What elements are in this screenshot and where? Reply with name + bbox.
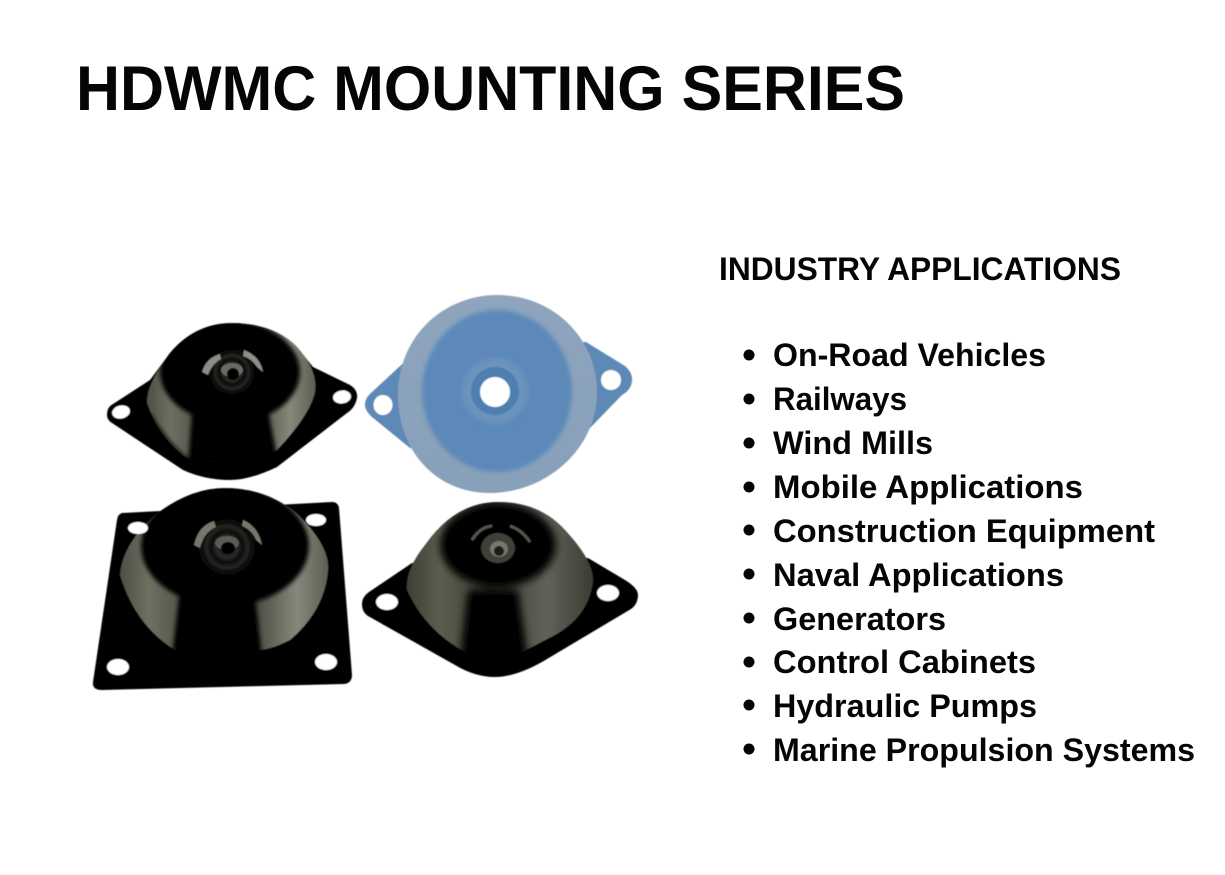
list item: Generators: Generators <box>773 601 946 637</box>
list item: Marine Propulsion Systems: Marine Propulsion Systems <box>773 732 1195 768</box>
mount: blue diamond flange, top right <box>365 295 632 493</box>
mount: black square flange, bottom left <box>93 486 352 690</box>
list item: Control Cabinets: Control Cabinets <box>773 644 1036 680</box>
list item: On-Road Vehicles: On-Road Vehicles <box>773 337 1046 373</box>
threaded insert <box>194 516 262 578</box>
product photo: four anti-vibration mounts <box>93 295 638 690</box>
heading: industry applications: INDUSTRY APPLICATIONS <box>719 251 1121 287</box>
list item: Construction Equipment: Construction Equipment <box>773 513 1155 549</box>
title: HDWMC MOUNTING SERIES <box>76 54 905 124</box>
threaded insert <box>471 525 530 571</box>
list item: Hydraulic Pumps: Hydraulic Pumps <box>773 688 1037 724</box>
list: industry applications <box>744 337 1195 768</box>
centre hole <box>462 358 528 424</box>
mount: black diamond flange with cone dome, bottom right <box>362 502 638 677</box>
list item: Naval Applications: Naval Applications <box>773 557 1064 593</box>
mount: black diamond flange, top left <box>107 321 357 480</box>
threaded insert <box>202 347 263 397</box>
list item: Wind Mills: Wind Mills <box>773 425 933 461</box>
list item: Mobile Applications: Mobile Applications <box>773 469 1083 505</box>
list item: Railways: Railways <box>773 381 907 417</box>
